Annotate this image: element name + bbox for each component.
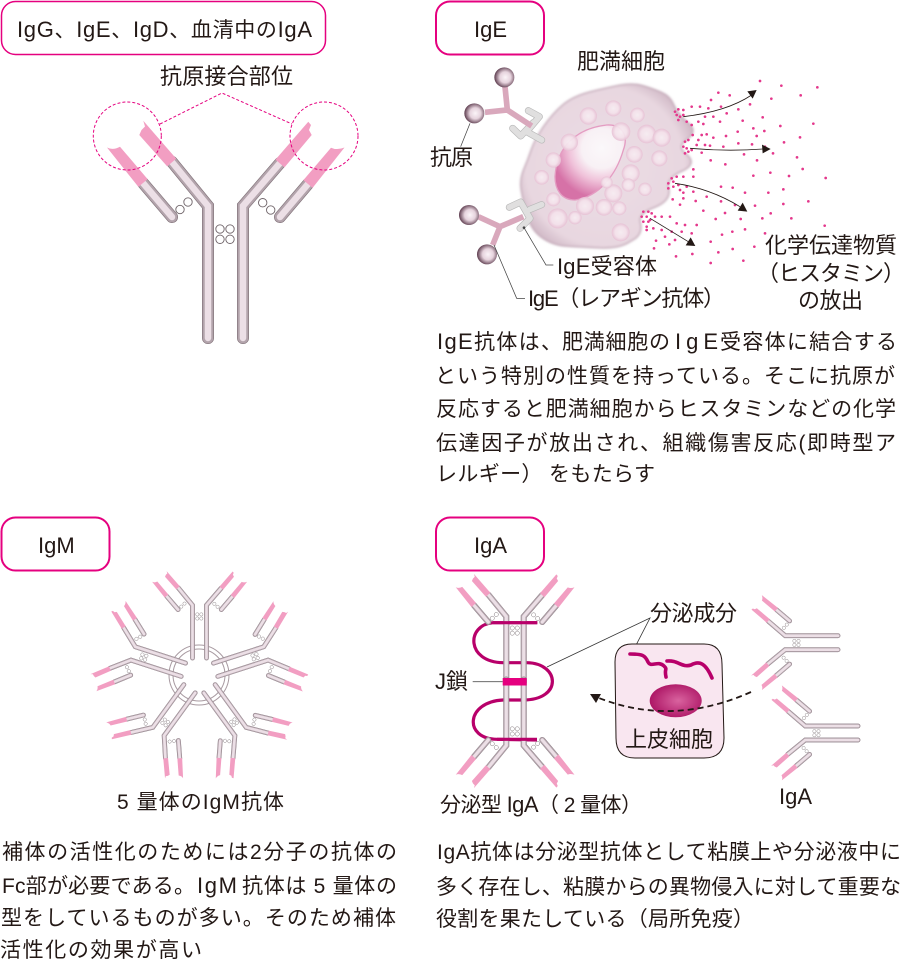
receptors [509,111,542,228]
panel: epithelial cell [615,644,724,758]
mast cell [521,85,692,247]
antigen-bound IgE, lower [459,205,523,264]
diagram: IgG antibody [93,93,358,338]
leader lines [461,123,553,298]
antigen-bound IgE, upper [464,67,532,126]
header: IgE: IgE [474,17,507,42]
label: chemical mediator release: 化学伝達物質 [765,233,897,258]
header: IgA: IgA [474,533,507,558]
header: IgG IgE IgD serum IgA [2,2,326,54]
label: J chain: J鎖 [435,669,468,694]
header: IgM [2,518,110,570]
text block: IgM description: 補体の活性化のためには2分子の抗体の [2,841,397,864]
text block: IgE description [435,329,897,486]
mediator dots [642,81,826,263]
caption: pentameric IgM: 5 量体のIgM抗体 [117,791,284,814]
text block: IgM description: Fc部が必要である。 [2,875,195,898]
text block: IgE description: IgE抗体は、 [437,329,562,354]
text block: IgE description: という特別の性質を持っている。そこに抗原が [435,365,895,388]
text block: IgE description: IgE [675,329,718,354]
text block: IgA description: 役割を果たしている（局所免疫） [436,908,754,931]
header: IgA [436,518,544,570]
arrow: transcytosis [590,692,751,711]
text block: IgE description: 反応すると肥満細胞からヒスタミンなどの化学 [436,398,896,421]
caption: secretory IgA dimer: 分泌型 IgA（ 2 量体） [440,792,642,817]
text block: IgE description: 伝達因子が放出され、組織傷害反応(即時型ア [436,432,896,455]
label: IgE reagin antibody: IgE（レアギン抗体） [528,286,725,311]
text block: IgE description: 受容体に結合する [720,331,897,354]
diagram: IgM pentamer [86,571,313,787]
label: chemical mediator release [757,233,900,313]
text block: IgM description [0,841,397,960]
label: IgE receptor: IgE受容体 [557,254,657,279]
text block: IgE description: 肥満細胞の [562,331,670,354]
label: antigen binding site: 抗原接合部位 [160,64,293,89]
text block: IgM description: IgM [197,873,237,898]
diagram: mast cell with IgE and mediators [459,67,826,298]
J chain [503,678,527,686]
label: chemical mediator release: の放出 [798,288,863,313]
header: IgM: IgM [38,533,75,558]
text block: IgE description: レルギー） をもたらす [436,463,655,486]
diagram: secretory IgA dimer [456,574,650,788]
arrows: mediator release [650,90,771,246]
text block: IgA description: 多く存在し、粘膜からの異物侵入に対して重要な [436,876,900,899]
header: IgE [436,2,544,54]
label: secretory component: 分泌成分 [650,601,737,626]
text block: IgM description: 抗体は 5 量体の [242,875,397,898]
label: IgA monomer: IgA [779,784,812,809]
text block: IgA description: IgA抗体は分泌型抗体として粘膜上や分泌液中に [437,841,900,864]
text block: IgM description: 型をしているものが多い。そのため補体 [1,907,396,930]
lower monomer [456,680,574,788]
upper monomer [456,574,574,682]
label: antigen: 抗原 [430,145,473,170]
label: mast cell: 肥満細胞 [577,49,665,74]
diagram: IgA monomers [751,595,858,780]
text block: IgA description [436,841,900,931]
panel: epithelial cell: 上皮細胞 [625,727,713,752]
secretory component chain [473,623,552,740]
header: IgG IgE IgD serum IgA: IgG、IgE、IgD、血清中のIgA [17,17,312,42]
